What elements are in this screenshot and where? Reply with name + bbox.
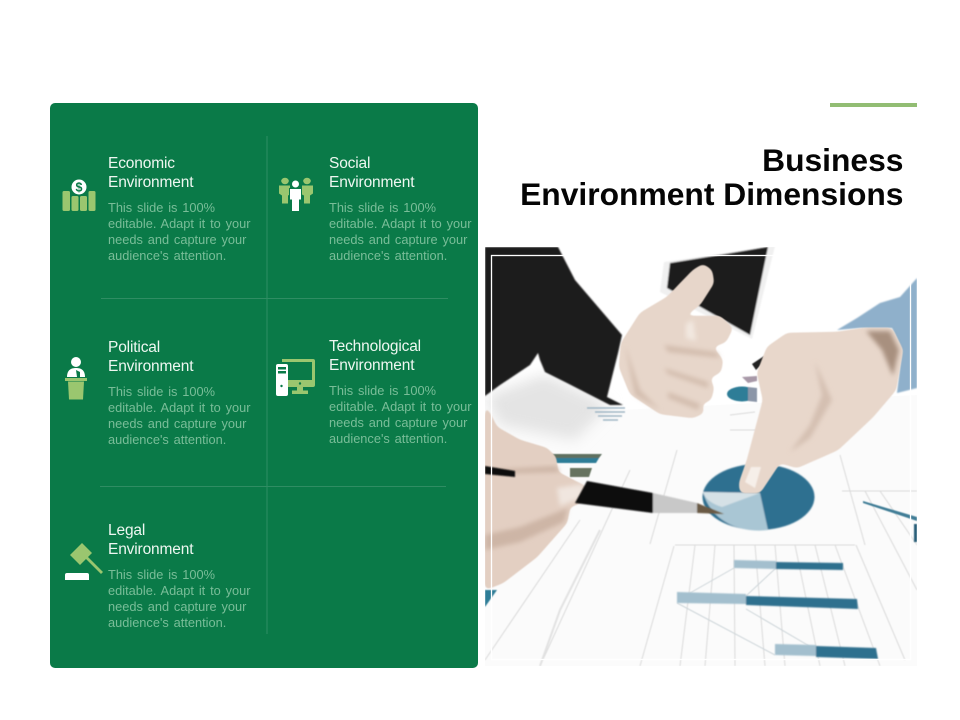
text: Legal description: [108, 567, 251, 630]
text: Social description: needs and capture your: [329, 232, 467, 247]
text: Political description: This slide is 100%: [108, 384, 215, 399]
icon: money and bars: [62, 180, 96, 211]
icon: desktop computer: [276, 359, 315, 396]
hand: holding pen: [485, 403, 587, 590]
item: Social Environment: [329, 155, 472, 263]
text: Economic description: editable. Adapt it to your: [108, 216, 251, 231]
heading: Legal Environment: Environment: [108, 541, 193, 558]
pen: [485, 466, 724, 514]
photo: business people reviewing charts: [485, 247, 917, 666]
text: Legal description: audience's attention.: [108, 615, 226, 630]
text: Economic description: needs and capture your: [108, 232, 246, 247]
dark suit arm: [485, 247, 623, 405]
text: Legal description: editable. Adapt it to your: [108, 583, 251, 598]
text: Economic description: [108, 200, 251, 263]
blue shirt sleeve: [837, 278, 917, 393]
heading: Political Environment: [108, 339, 194, 375]
monitor: [660, 246, 775, 339]
bar chart: [677, 560, 878, 659]
item: Political Environment: [108, 339, 251, 447]
text: Social description: [329, 200, 472, 263]
text: Economic description: audience's attention.: [108, 248, 226, 263]
pie chart: [702, 464, 814, 531]
text: Technological description: [329, 383, 472, 446]
photo inner frame: [492, 256, 910, 660]
text: Social description: editable. Adapt it to your: [329, 216, 472, 231]
heading: Legal Environment: Legal: [108, 522, 145, 539]
heading: Social Environment: Social: [329, 155, 370, 172]
item: Economic Environment: [108, 155, 251, 263]
paper chart lines: [485, 412, 917, 666]
item: Legal Environment: [108, 522, 251, 630]
accent bar: [830, 103, 917, 107]
title: Environment Dimensions: [520, 176, 904, 212]
title: [520, 142, 904, 212]
heading: Legal Environment: [108, 522, 194, 558]
heading: Economic Environment: Environment: [108, 174, 193, 191]
icon: gavel: [65, 543, 103, 580]
text: Technological description: editable. Adapt it to your: [329, 399, 472, 414]
text: Political description: editable. Adapt it to your: [108, 400, 251, 415]
heading: Social Environment: [329, 155, 414, 191]
text: Political description: needs and capture your: [108, 416, 246, 431]
text: Technological description: This slide is 100%: [329, 383, 436, 398]
text: Technological description: needs and capture your: [329, 415, 467, 430]
hand: pointing at pie: [739, 328, 903, 493]
text: Legal description: This slide is 100%: [108, 567, 215, 582]
heading: Technological Environment: Environment: [329, 357, 414, 374]
panel: green dimensions panel: [50, 103, 478, 668]
text: Technological description: audience's attention.: [329, 431, 447, 446]
text: Economic description: This slide is 100%: [108, 200, 215, 215]
hand: open gesture: [619, 264, 733, 418]
icon: group of people: [279, 178, 313, 211]
heading: Technological Environment: [329, 338, 421, 374]
background mini charts: [485, 356, 917, 607]
text: Political description: audience's attention.: [108, 432, 226, 447]
item: Technological Environment: [329, 338, 472, 446]
icon: speaker at podium: [65, 357, 87, 400]
heading: Political Environment: Environment: [108, 358, 193, 375]
text: Social description: This slide is 100%: [329, 200, 436, 215]
text: Legal description: needs and capture your: [108, 599, 246, 614]
table surface: [485, 395, 917, 666]
heading: Economic Environment: Economic: [108, 155, 175, 172]
heading: Social Environment: Environment: [329, 174, 414, 191]
heading: Political Environment: Political: [108, 339, 160, 356]
title: Business: [762, 142, 904, 178]
icon: money and bars: $: [76, 180, 83, 194]
text: Social description: audience's attention.: [329, 248, 447, 263]
text: Political description: [108, 384, 251, 447]
heading: Technological Environment: Technological: [329, 338, 421, 355]
heading: Economic Environment: [108, 155, 194, 191]
